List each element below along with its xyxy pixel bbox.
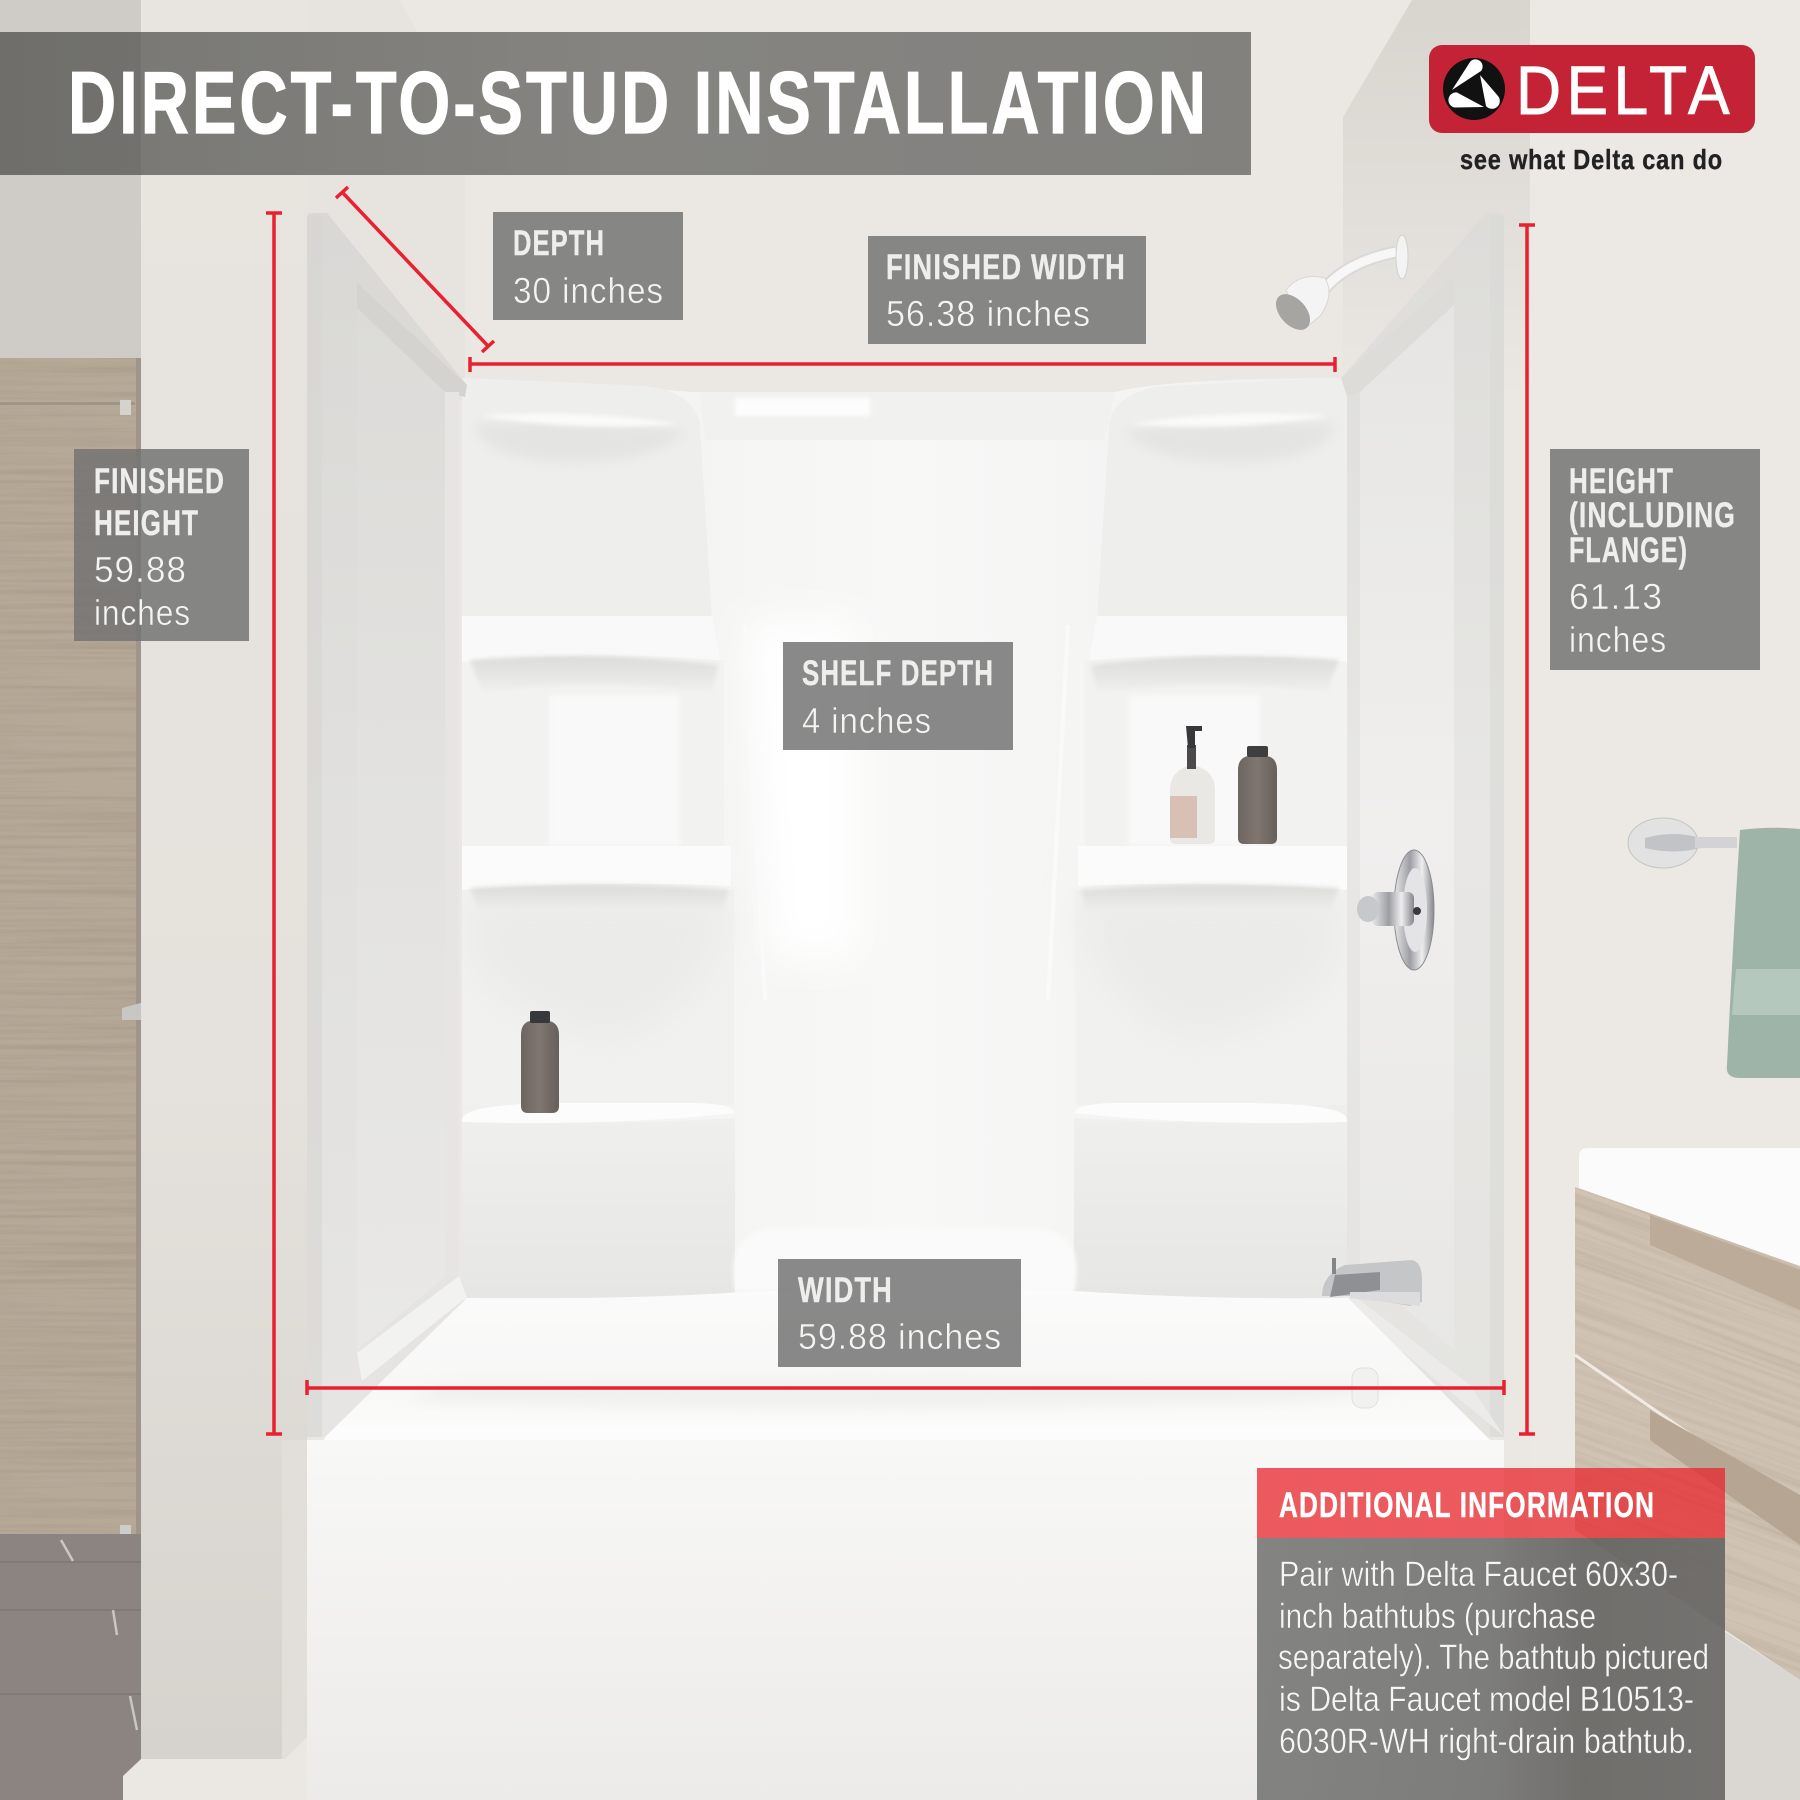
door jamb and baseboard <box>123 0 317 1800</box>
icon: gray bottle left <box>521 1011 559 1113</box>
additional information body: is Delta Faucet model B10513- <box>1279 1680 1694 1719</box>
label: finished height: FINISHED <box>94 462 225 501</box>
label: depth <box>493 212 683 320</box>
title banner: DIRECT-TO-STUD INSTALLATION <box>68 53 1209 152</box>
label: width <box>778 1259 1021 1367</box>
label: shelf depth <box>783 642 1013 750</box>
label: height including flange <box>1550 449 1760 670</box>
label: finished width: FINISHED WIDTH <box>886 248 1126 287</box>
left side panel <box>307 213 467 1437</box>
dimension: height line <box>1519 225 1535 1434</box>
logo wordmark: DELTA <box>1516 52 1735 129</box>
floor <box>0 1534 141 1800</box>
vanity cabinet <box>1575 1187 1800 1680</box>
dimension: finished width line <box>470 357 1335 372</box>
dimension: finished height line <box>266 213 282 1434</box>
panel: additional information <box>1257 1468 1725 1800</box>
icon: towel bar <box>1628 818 1737 868</box>
label: finished width <box>868 236 1146 344</box>
bathtub <box>307 1288 1504 1800</box>
additional information body: 6030R-WH right-drain bathtub. <box>1279 1722 1694 1761</box>
icon: soap pump bottle <box>1170 726 1215 844</box>
additional information body: separately). The bathtub pictured <box>1278 1638 1709 1677</box>
logo badge <box>1429 45 1755 133</box>
label: finished height: 59.88 <box>94 549 187 590</box>
label: finished height <box>74 449 249 641</box>
tagline: see what Delta can do <box>1460 144 1723 175</box>
label: shelf depth: SHELF DEPTH <box>802 654 994 693</box>
icon: gray bottle right <box>1238 746 1277 844</box>
additional information body: Pair with Delta Faucet 60x30- <box>1279 1555 1678 1594</box>
label: height including flange: HEIGHT <box>1569 462 1674 501</box>
label: width: 59.88 inches <box>798 1316 1002 1357</box>
title banner <box>0 32 1251 175</box>
dimension: width line <box>307 1380 1504 1395</box>
shower wall back panel <box>462 378 1347 1300</box>
shelves right <box>1074 378 1347 1298</box>
label: depth: DEPTH <box>513 224 605 263</box>
additional information body: inch bathtubs (purchase <box>1279 1597 1596 1636</box>
label: finished width: 56.38 inches <box>886 293 1091 334</box>
left doorway wall <box>0 0 141 358</box>
bottom ledge of back wall <box>733 1228 1077 1290</box>
label: finished height: inches <box>94 592 191 633</box>
additional information heading <box>1257 1468 1725 1538</box>
right side panel <box>1340 213 1504 1437</box>
icon: Delta mark <box>1443 58 1505 120</box>
towel <box>1727 828 1800 1078</box>
Delta logo <box>1429 45 1755 175</box>
label: height including flange: inches <box>1569 619 1667 660</box>
label: height including flange: FLANGE) <box>1569 531 1688 570</box>
icon: shower head <box>1269 235 1408 336</box>
label: depth: 30 inches <box>513 270 664 311</box>
dimension: depth line <box>336 187 494 352</box>
label: finished height: HEIGHT <box>94 504 199 543</box>
label: height including flange: (INCLUDING <box>1569 496 1736 535</box>
label: shelf depth: 4 inches <box>802 700 932 741</box>
vanity countertop <box>1579 1148 1800 1266</box>
shelves left <box>462 378 735 1298</box>
icon: tub spout <box>1322 1258 1422 1306</box>
floor right <box>1725 1632 1800 1800</box>
label: width: WIDTH <box>798 1271 893 1310</box>
icon: shower valve <box>1357 850 1434 970</box>
additional information heading: ADDITIONAL INFORMATION <box>1279 1486 1655 1525</box>
label: height including flange: 61.13 <box>1569 576 1663 617</box>
wood door <box>0 358 141 1540</box>
additional information body <box>1257 1538 1725 1800</box>
